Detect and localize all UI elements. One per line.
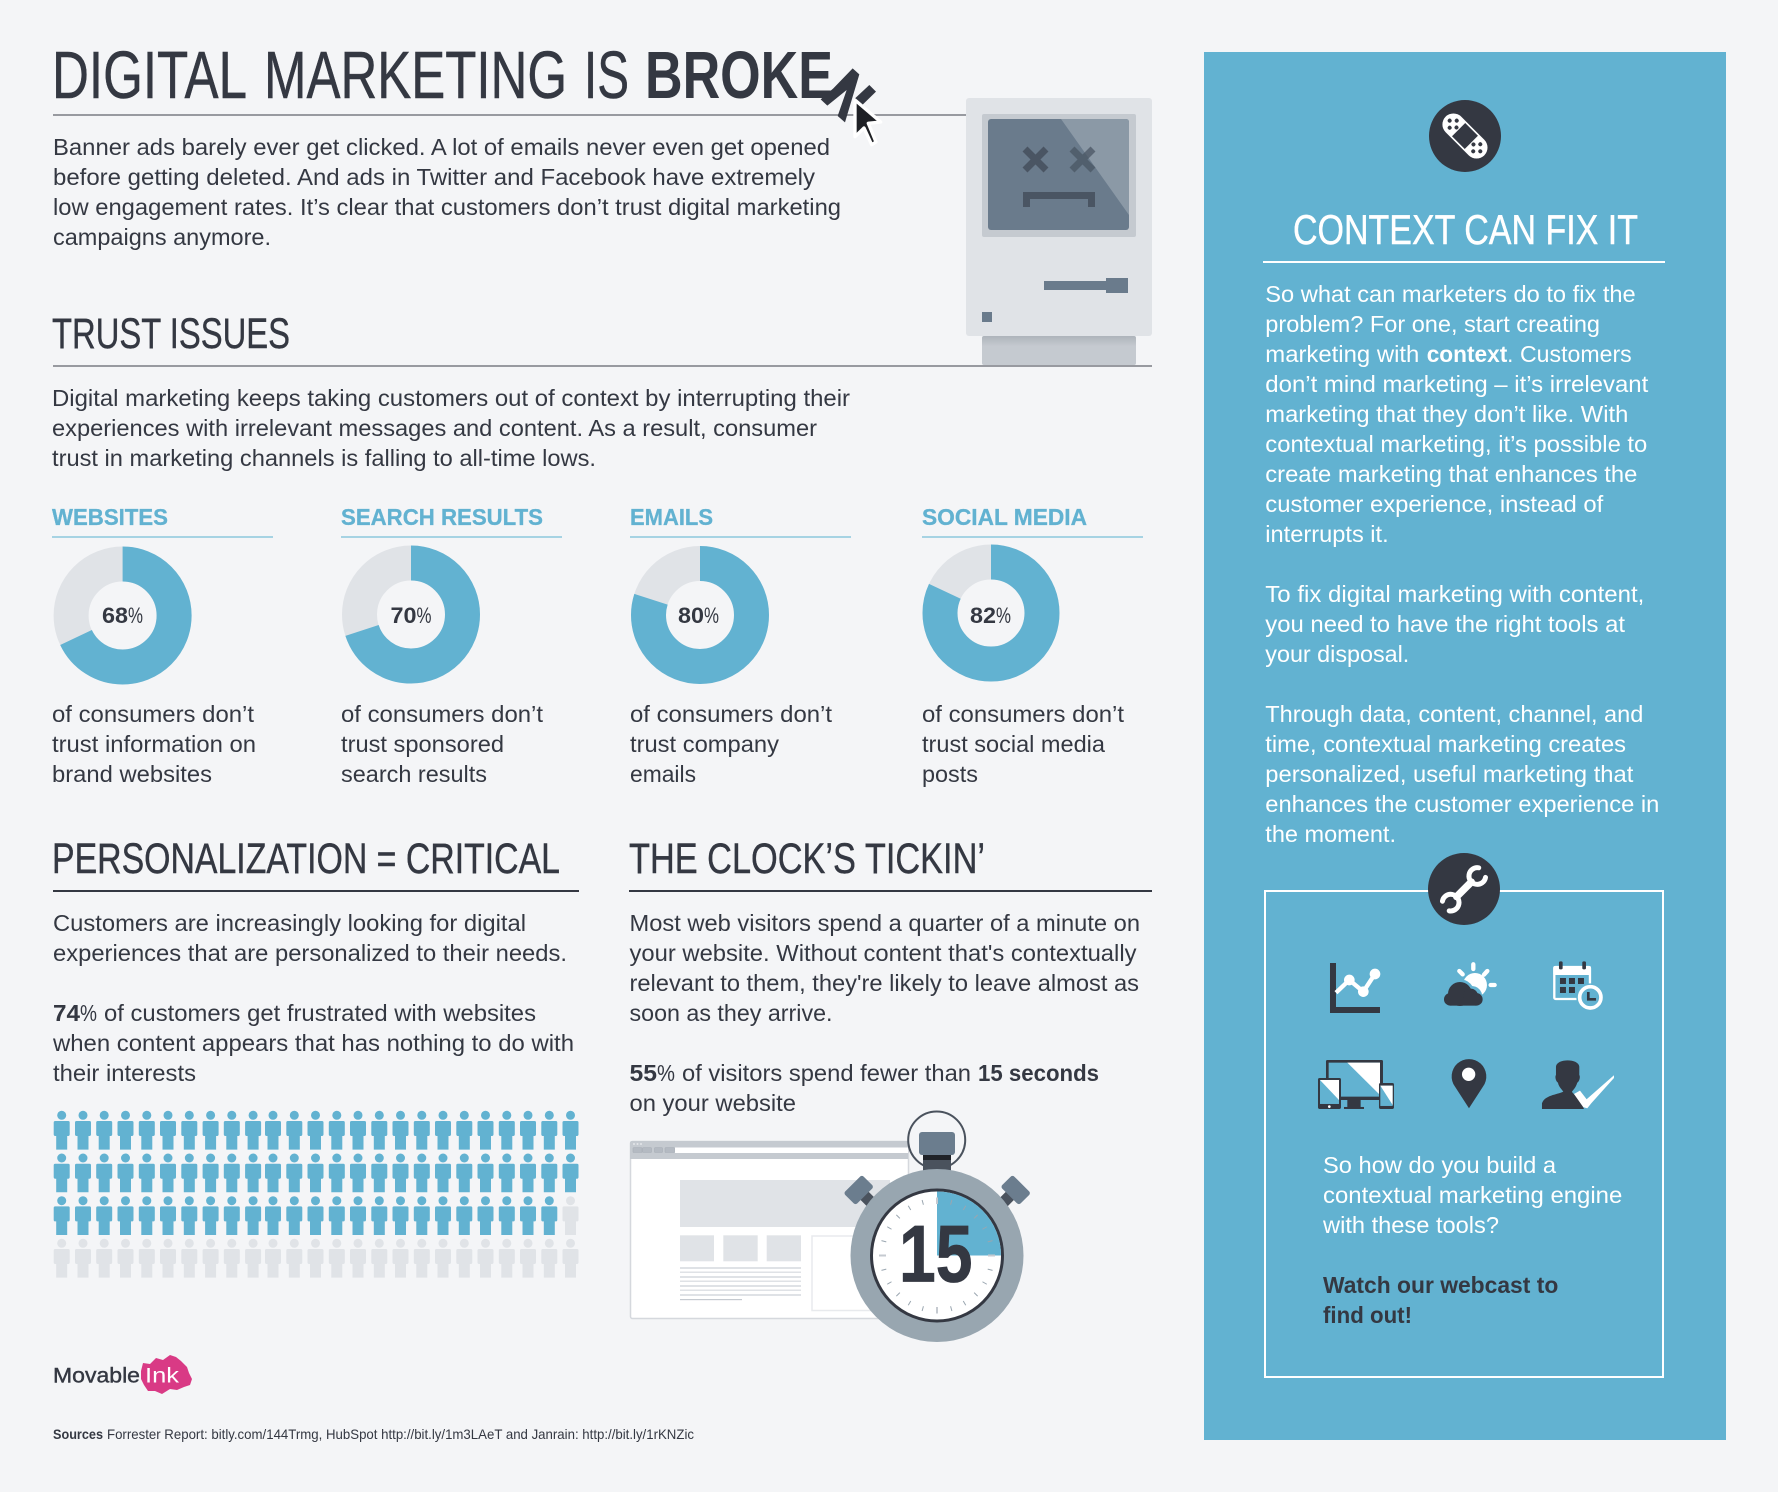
icon: calendar with clock	[1553, 961, 1604, 1011]
personalization text	[52, 910, 574, 1086]
panel heading: CONTEXT CAN FIX IT	[1293, 206, 1638, 253]
icon: location pin	[1452, 1059, 1486, 1108]
personalization text: experiences that are personalized to their needs.	[53, 940, 567, 966]
chart: 74 of 100 people pictogram	[54, 1111, 578, 1278]
icon: devices	[1318, 1060, 1394, 1109]
stat: search results 70%: of consumers don’t	[341, 701, 543, 727]
tools box outline	[1265, 891, 1663, 1377]
panel body text: enhances the customer experience in	[1265, 791, 1659, 817]
stat: social media 82%	[922, 504, 1143, 787]
stat: search results 70%: trust sponsored	[341, 731, 504, 757]
call to action text: find out!	[1323, 1302, 1412, 1328]
stat: emails 80%: EMAILS	[630, 504, 713, 530]
logo: Movable Ink: Ink	[145, 1364, 180, 1388]
intro paragraph	[53, 134, 841, 250]
clock text: %	[657, 1060, 675, 1086]
stat: websites 68%: %	[128, 603, 143, 628]
call to action text: contextual marketing engine	[1323, 1182, 1622, 1208]
logo: Movable Ink	[53, 1355, 192, 1394]
title: Digital Marketing Is Broken: IS	[584, 38, 629, 113]
panel body text: .	[1507, 341, 1513, 367]
intro paragraph: campaigns anymore.	[53, 224, 271, 250]
personalization text: %	[80, 1000, 97, 1026]
panel body text: To fix digital marketing with content,	[1265, 581, 1644, 607]
heading: Personalization = Critical: PERSONALIZATION = CRITICAL	[52, 835, 560, 883]
logo: Movable Ink: Movable	[53, 1364, 140, 1388]
panel body text: contextual marketing, it’s possible to	[1265, 431, 1647, 457]
stat: websites 68%: WEBSITES	[52, 504, 168, 530]
trust paragraph: experiences with irrelevant messages and content. As a result, consumer	[52, 415, 817, 441]
stat: search results 70%: search results	[341, 761, 487, 787]
stat: social media 82%: SOCIAL MEDIA	[922, 504, 1087, 530]
clock text: soon as they arrive.	[630, 1000, 832, 1026]
personalization text: 74	[53, 1000, 80, 1026]
personalization text: their interests	[53, 1060, 196, 1086]
stat: social media 82%: posts	[922, 761, 978, 787]
panel body text	[1265, 281, 1659, 847]
personalization text: of customers get frustrated with websites	[104, 1000, 536, 1026]
panel body text: Customers	[1520, 341, 1632, 367]
clock text: Most web visitors spend a quarter of a minute on	[630, 910, 1140, 936]
clock text: 15 seconds	[978, 1060, 1099, 1086]
panel body text: create marketing that enhances the	[1265, 461, 1637, 487]
title: Digital Marketing Is Broken: MARKETING	[264, 38, 567, 113]
stat: social media 82%: of consumers don’t	[922, 701, 1124, 727]
title rule	[53, 114, 968, 116]
stat: social media 82%: 82	[970, 603, 996, 628]
stat: emails 80%: %	[704, 603, 719, 628]
panel body text: problem? For one, start creating	[1265, 311, 1600, 337]
illustration: stopwatch showing 15 seconds	[843, 1112, 1031, 1342]
trust paragraph: Digital marketing keeps taking customers out of context by interrupting their	[52, 385, 850, 411]
stat: websites 68%	[52, 504, 273, 787]
sources footnote: Sources	[53, 1426, 103, 1442]
icon: mouse cursor	[855, 100, 881, 145]
stat: emails 80%: of consumers don’t	[630, 701, 832, 727]
panel body text: your disposal.	[1265, 641, 1409, 667]
panel body text: So what can marketers do to fix the	[1265, 281, 1636, 307]
stat: social media 82%: trust social media	[922, 731, 1106, 757]
panel body text: you need to have the right tools at	[1265, 611, 1625, 637]
panel body text: customer experience, instead of	[1265, 491, 1604, 517]
clock text: 55	[630, 1060, 657, 1086]
heading: The Clock's Tickin': THE CLOCK’S TICKIN’	[629, 835, 985, 883]
clock text: of visitors spend fewer than	[682, 1060, 971, 1086]
call to action text: So how do you build a	[1323, 1152, 1557, 1178]
icon: line chart	[1330, 963, 1380, 1013]
panel: context can fix it	[1204, 52, 1726, 1440]
intro paragraph: Banner ads barely ever get clicked. A lot of emails never even get opened	[53, 134, 830, 160]
stat: search results 70%: 70	[390, 603, 416, 628]
stat: search results 70%	[341, 504, 562, 787]
title: Digital Marketing Is Broken: DIGITAL	[52, 38, 247, 113]
panel body text: marketing with	[1265, 341, 1419, 367]
trust paragraph	[52, 385, 850, 471]
panel body text: the moment.	[1265, 821, 1396, 847]
illustration: browser window	[630, 1141, 908, 1318]
title: Digital Marketing Is Broken	[52, 38, 876, 122]
clock text: your website. Without content that's contextually	[630, 940, 1137, 966]
icon: broken computer	[966, 98, 1152, 365]
stat: websites 68%: brand websites	[52, 761, 212, 787]
personalization text: when content appears that has nothing to do with	[52, 1030, 574, 1056]
panel body text: context	[1427, 341, 1507, 367]
panel body text: time, contextual marketing creates	[1265, 731, 1626, 757]
panel body text: don’t mind marketing – it’s irrelevant	[1265, 371, 1649, 397]
clock text: on your website	[630, 1090, 796, 1116]
stat: search results 70%: %	[416, 603, 432, 628]
heading: Trust Issues: TRUST ISSUES	[52, 310, 290, 358]
stat: search results 70%: SEARCH RESULTS	[341, 504, 543, 530]
icon: person with checkmark	[1542, 1060, 1614, 1109]
icon: wrench	[1428, 853, 1500, 925]
sources footnote: Forrester Report: bitly.com/144Trmg, HubSpot http://bit.ly/1m3LAeT and Janrain: http://bit.ly/1rKNZic	[107, 1426, 694, 1442]
stat: emails 80%: trust company	[630, 731, 779, 757]
stat: websites 68%: trust information on	[52, 731, 256, 757]
intro paragraph: low engagement rates. It’s clear that customers don’t trust digital marketing	[53, 194, 841, 220]
icon: weather	[1444, 964, 1495, 1009]
panel body text: personalized, useful marketing that	[1265, 761, 1634, 787]
personalization text: Customers are increasingly looking for digital	[53, 910, 526, 936]
title: Digital Marketing Is Broken: BROKE	[645, 38, 833, 113]
clock text	[630, 910, 1140, 1116]
trust paragraph: trust in marketing channels is falling to all-time lows.	[52, 445, 596, 471]
icon: bandage	[1429, 100, 1501, 172]
call to action text: with these tools?	[1322, 1212, 1499, 1238]
call to action text	[1322, 1152, 1622, 1328]
intro paragraph: before getting deleted. And ads in Twitter and Facebook have extremely	[53, 164, 815, 190]
call to action text: Watch our webcast to	[1323, 1272, 1558, 1298]
stat: social media 82%: %	[996, 603, 1011, 628]
panel body text: marketing that they don’t like. With	[1265, 401, 1628, 427]
stat: emails 80%: emails	[630, 761, 696, 787]
panel body text: interrupts it.	[1265, 521, 1389, 547]
stat: emails 80%	[630, 504, 851, 787]
stat: websites 68%: of consumers don’t	[52, 701, 254, 727]
clock text: relevant to them, they're likely to leave almost as	[630, 970, 1139, 996]
stat: emails 80%: 80	[678, 603, 704, 628]
illustration: stopwatch showing 15 seconds: 15	[899, 1210, 972, 1300]
stat: websites 68%: 68	[102, 603, 128, 628]
panel body text: Through data, content, channel, and	[1265, 701, 1643, 727]
